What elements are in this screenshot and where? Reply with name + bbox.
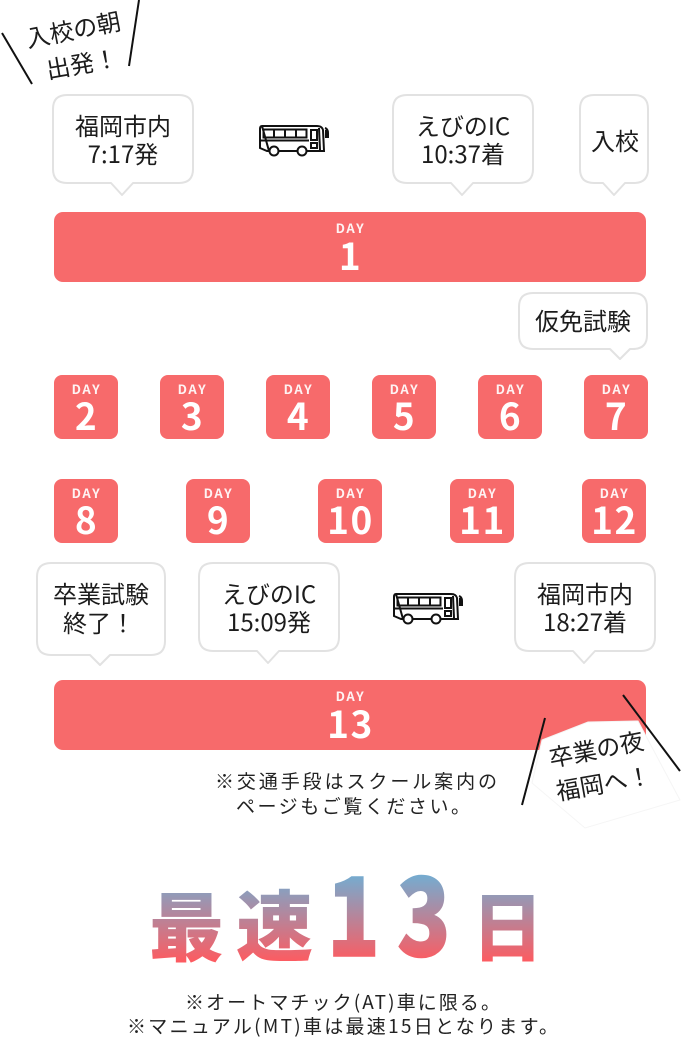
bubble: Fukuoka arrival — [515, 563, 655, 663]
bubble: provisional license exam: 仮免試験 — [535, 302, 631, 337]
footnotes: AT and MT — [127, 988, 558, 1038]
note: transportation: ※交通手段はスクール案内の — [215, 767, 497, 794]
callout: morning departure: 出発！ — [43, 39, 120, 86]
bar: day 1: DAY — [336, 218, 365, 237]
tile: day 11: DAY — [468, 483, 497, 502]
bubble: Fukuoka departure — [53, 95, 193, 195]
tile: day 3: DAY — [178, 379, 207, 398]
icon: bus — [260, 126, 328, 156]
tile: day 12: DAY — [600, 483, 629, 502]
bubble: Ebino IC arrival — [393, 95, 533, 195]
tile: day 4: 4 — [287, 387, 310, 441]
callout: morning departure — [2, 0, 139, 86]
tile: day 2: 2 — [75, 387, 98, 441]
callout: morning departure: 入校の朝 — [23, 2, 123, 55]
bubble: enrollment — [580, 95, 648, 195]
tile: day 3: 3 — [181, 387, 204, 441]
tile: day 2 — [54, 375, 118, 441]
bubble: Ebino IC departure — [199, 563, 339, 663]
tile: day 6: DAY — [496, 379, 525, 398]
tile: day 6 — [478, 375, 542, 441]
tile: day 9: 9 — [207, 491, 230, 545]
bubble: Fukuoka departure: 7:17発 — [88, 135, 158, 170]
tile: day 7 — [584, 375, 648, 441]
icon: bus — [394, 594, 462, 624]
callout: back to Fukuoka that night: 卒業の夜 — [546, 721, 646, 774]
bubble: Ebino IC departure: えびのIC — [222, 575, 316, 610]
tile: day 7: 7 — [605, 387, 628, 441]
bubble: Ebino IC departure: 15:09発 — [227, 603, 311, 638]
bubble: provisional license exam — [519, 293, 647, 359]
tile: day 11: 11 — [459, 491, 506, 545]
headline: fastest 13 days: 最 — [149, 868, 224, 977]
bubble: Ebino IC arrival: えびのIC — [416, 107, 510, 142]
tile: day 8 — [54, 479, 118, 545]
bubble: graduation exam finished: 卒業試験 — [53, 575, 149, 610]
bar: day 13: DAY — [336, 686, 365, 705]
headline: fastest 13 days: 日 — [472, 869, 543, 978]
callout: back to Fukuoka that night — [522, 695, 680, 828]
headline: fastest 13 days: 速 — [236, 867, 313, 978]
bubble: Fukuoka arrival: 福岡市内 — [537, 575, 633, 610]
tile: day 12 — [582, 479, 646, 545]
bubble: Ebino IC arrival: 10:37着 — [421, 135, 505, 170]
bubble: enrollment: 入校 — [591, 122, 639, 157]
bubble: graduation exam finished — [37, 563, 165, 665]
callout: back to Fukuoka that night: 福岡へ！ — [553, 756, 653, 807]
bar: day 13 — [54, 680, 646, 750]
bubble: graduation exam finished: 終了！ — [63, 604, 135, 639]
headline: fastest 13 days: 1 — [327, 834, 380, 987]
bar: day 1: 1 — [339, 227, 362, 281]
tile: day 11 — [450, 479, 514, 545]
note: transportation — [215, 767, 497, 819]
tile: day 8: DAY — [72, 483, 101, 502]
tile: day 8: 8 — [75, 491, 98, 545]
tile: day 9: DAY — [204, 483, 233, 502]
tile: day 7: DAY — [602, 379, 631, 398]
tile: day 3 — [160, 375, 224, 441]
tile: day 5 — [372, 375, 436, 441]
tile: day 10: DAY — [336, 483, 365, 502]
tile: day 4 — [266, 375, 330, 441]
tile: day 2: DAY — [72, 379, 101, 398]
tile: day 4: DAY — [284, 379, 313, 398]
tile: day 5: DAY — [390, 379, 419, 398]
tile: day 5: 5 — [393, 387, 416, 441]
tile: day 10: 10 — [327, 491, 374, 545]
headline: fastest 13 days: 3 — [397, 834, 451, 988]
headline: fastest 13 days — [149, 834, 543, 988]
note: transportation: ページもご覧ください。 — [236, 792, 470, 819]
tile: day 9 — [186, 479, 250, 545]
tile: day 12: 12 — [591, 491, 638, 545]
bar: day 13: 13 — [327, 695, 374, 749]
bar: day 1 — [54, 212, 646, 282]
tile: day 10 — [318, 479, 382, 545]
bubble: Fukuoka arrival: 18:27着 — [543, 603, 627, 638]
footnotes: AT and MT: ※オートマチック(AT)車に限る。 — [185, 988, 500, 1015]
bubble: Fukuoka departure: 福岡市内 — [75, 107, 171, 142]
tile: day 6: 6 — [499, 387, 522, 441]
